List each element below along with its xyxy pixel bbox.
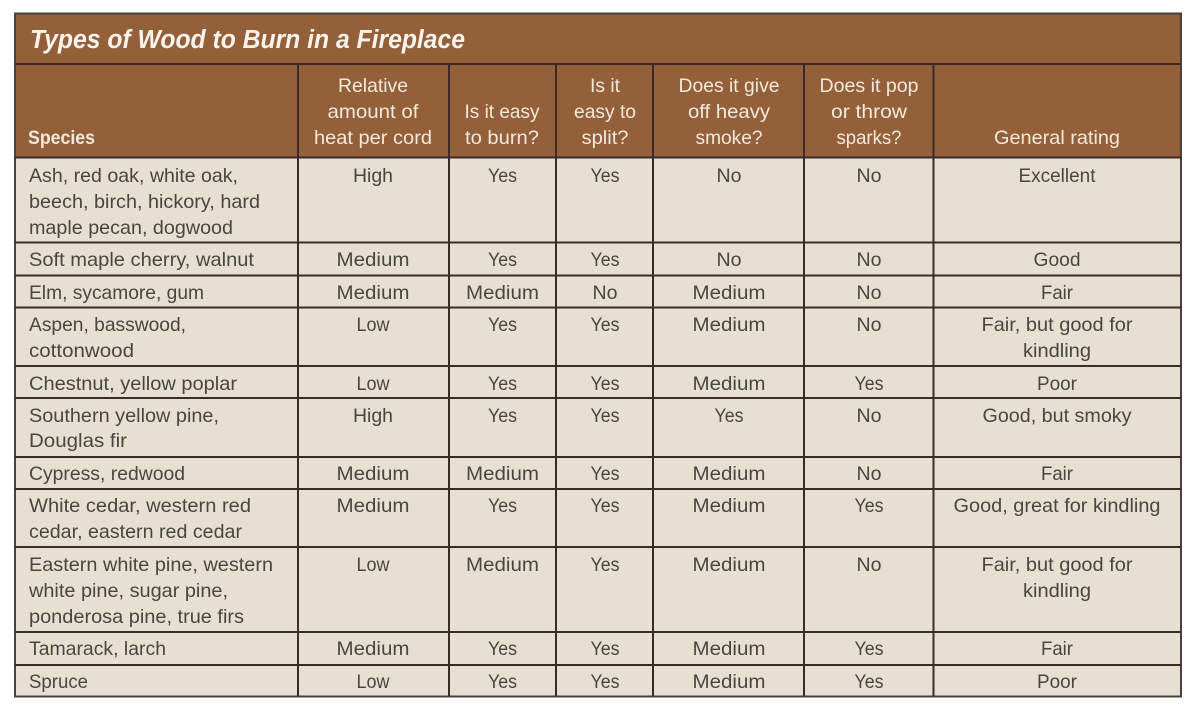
row: aspen: Medium bbox=[692, 314, 766, 336]
row: chestnut: Yes bbox=[488, 373, 517, 395]
column header row: split? bbox=[582, 127, 629, 149]
column header row: Is it bbox=[590, 75, 621, 97]
row: white pine bbox=[28, 554, 1133, 628]
row: southern yellow pine: Yes bbox=[714, 405, 744, 427]
row: white pine: white pine, sugar pine, bbox=[28, 580, 228, 602]
column header row: Does it give bbox=[678, 75, 780, 97]
row: ash, oak group: Ash, red oak, white oak, bbox=[29, 165, 238, 187]
row: aspen: kindling bbox=[1023, 340, 1091, 362]
row: chestnut: Yes bbox=[854, 373, 884, 395]
row: white pine: Fair, but good for bbox=[982, 554, 1133, 576]
row: tamarack: Yes bbox=[488, 638, 517, 660]
column header row: General rating bbox=[994, 127, 1120, 149]
row: southern yellow pine: Yes bbox=[488, 405, 517, 427]
column header row: Relative bbox=[338, 75, 408, 97]
row: southern yellow pine: High bbox=[353, 405, 393, 427]
row: white pine: Yes bbox=[590, 554, 620, 576]
row: cedar: Medium bbox=[692, 495, 766, 517]
row: white pine: No bbox=[856, 554, 882, 576]
row: tamarack bbox=[29, 638, 1073, 660]
row: soft maple: No bbox=[716, 249, 742, 271]
row: southern yellow pine: Douglas fir bbox=[29, 430, 128, 452]
row: spruce: Yes bbox=[488, 671, 517, 693]
row: tamarack: Medium bbox=[336, 638, 410, 660]
title banner: Types of Wood to Burn in a Fireplace bbox=[30, 26, 465, 54]
row: spruce: Low bbox=[356, 671, 390, 693]
row: aspen: Fair, but good for bbox=[982, 314, 1133, 336]
column header row: easy to bbox=[574, 101, 636, 123]
row: chestnut bbox=[29, 373, 1077, 395]
row: cypress bbox=[29, 463, 1073, 485]
row: soft maple: Yes bbox=[488, 249, 517, 271]
row: elm: Medium bbox=[692, 282, 766, 304]
row: chestnut: Low bbox=[356, 373, 390, 395]
row: white pine: kindling bbox=[1023, 580, 1091, 602]
row: ash, oak group: maple pecan, dogwood bbox=[29, 217, 233, 239]
row: elm: Elm, sycamore, gum bbox=[29, 282, 204, 304]
row: chestnut: Yes bbox=[590, 373, 620, 395]
row: elm: Fair bbox=[1041, 282, 1073, 304]
row: ash, oak group: Yes bbox=[488, 165, 517, 187]
row: spruce: Spruce bbox=[29, 671, 88, 693]
row: aspen: Yes bbox=[590, 314, 620, 336]
row: cypress: Medium bbox=[336, 463, 410, 485]
row: cypress: Medium bbox=[466, 463, 539, 485]
row: aspen: No bbox=[856, 314, 882, 336]
column header row bbox=[15, 64, 1181, 157]
row: ash, oak group: No bbox=[716, 165, 742, 187]
row: tamarack: Yes bbox=[854, 638, 884, 660]
row: southern yellow pine bbox=[29, 405, 1132, 452]
row: aspen: Aspen, basswood, bbox=[29, 314, 186, 336]
row: ash, oak group: beech, birch, hickory, hard bbox=[29, 191, 260, 213]
row: ash, oak group bbox=[29, 165, 1096, 239]
row: southern yellow pine: No bbox=[856, 405, 882, 427]
column header row: Species bbox=[28, 127, 95, 149]
row: cedar: Yes bbox=[854, 495, 884, 517]
row: elm: Medium bbox=[336, 282, 410, 304]
column header row: off heavy bbox=[688, 101, 770, 123]
row: white pine: Eastern white pine, western bbox=[29, 554, 273, 576]
row: ash, oak group: Excellent bbox=[1018, 165, 1096, 187]
row: cypress: Medium bbox=[692, 463, 766, 485]
column header row: Is it easy bbox=[464, 101, 540, 123]
column header row: amount of bbox=[328, 101, 419, 123]
column header row: or throw bbox=[831, 101, 908, 123]
row: ash, oak group: Yes bbox=[590, 165, 620, 187]
row: southern yellow pine: Southern yellow pine, bbox=[29, 405, 219, 427]
row: southern yellow pine: Yes bbox=[590, 405, 620, 427]
row: cypress: No bbox=[856, 463, 882, 485]
row: cedar: cedar, eastern red cedar bbox=[29, 521, 242, 543]
row: elm: Medium bbox=[466, 282, 539, 304]
row: spruce: Poor bbox=[1037, 671, 1077, 693]
row: soft maple: Good bbox=[1034, 249, 1080, 271]
row: white pine: Medium bbox=[692, 554, 766, 576]
row: spruce: Yes bbox=[854, 671, 884, 693]
row: white pine: ponderosa pine, true firs bbox=[29, 606, 244, 628]
row: soft maple: Soft maple cherry, walnut bbox=[29, 249, 255, 271]
row: soft maple bbox=[29, 249, 1080, 271]
row: aspen bbox=[29, 314, 1133, 362]
row: cypress: Yes bbox=[590, 463, 620, 485]
row: aspen: cottonwood bbox=[29, 340, 134, 362]
row: tamarack: Yes bbox=[590, 638, 620, 660]
row: spruce: Yes bbox=[590, 671, 620, 693]
row: cedar: Yes bbox=[488, 495, 517, 517]
title banner bbox=[15, 13, 1181, 64]
row: chestnut: Medium bbox=[692, 373, 766, 395]
row: ash, oak group: No bbox=[856, 165, 882, 187]
column header row: to burn? bbox=[465, 127, 539, 149]
row: cedar bbox=[29, 495, 1160, 543]
column header row: sparks? bbox=[836, 127, 902, 149]
row: elm bbox=[29, 282, 1073, 304]
row: aspen: Yes bbox=[488, 314, 517, 336]
column header row: smoke? bbox=[696, 127, 763, 149]
row: spruce: Medium bbox=[692, 671, 766, 693]
row: cypress: Cypress, redwood bbox=[29, 463, 185, 485]
row: soft maple: No bbox=[856, 249, 882, 271]
row: white pine: Low bbox=[356, 554, 390, 576]
row: soft maple: Medium bbox=[336, 249, 410, 271]
row: cedar: Medium bbox=[336, 495, 410, 517]
row: cedar: Good, great for kindling bbox=[954, 495, 1160, 517]
row: chestnut: Poor bbox=[1037, 373, 1077, 395]
row: aspen: Low bbox=[356, 314, 390, 336]
row: cedar: Yes bbox=[590, 495, 620, 517]
row: elm: No bbox=[856, 282, 882, 304]
row: tamarack: Tamarack, larch bbox=[29, 638, 166, 660]
row: spruce bbox=[29, 671, 1077, 693]
row: chestnut: Chestnut, yellow poplar bbox=[29, 373, 238, 395]
row: soft maple: Yes bbox=[590, 249, 620, 271]
row: elm: No bbox=[592, 282, 618, 304]
column header row: Does it pop bbox=[820, 75, 919, 97]
row: tamarack: Medium bbox=[692, 638, 766, 660]
row: ash, oak group: High bbox=[353, 165, 393, 187]
column header row: heat per cord bbox=[314, 127, 432, 149]
row: cypress: Fair bbox=[1041, 463, 1073, 485]
row: southern yellow pine: Good, but smoky bbox=[982, 405, 1132, 427]
row: white pine: Medium bbox=[466, 554, 539, 576]
row: cedar: White cedar, western red bbox=[29, 495, 251, 517]
row: tamarack: Fair bbox=[1041, 638, 1073, 660]
